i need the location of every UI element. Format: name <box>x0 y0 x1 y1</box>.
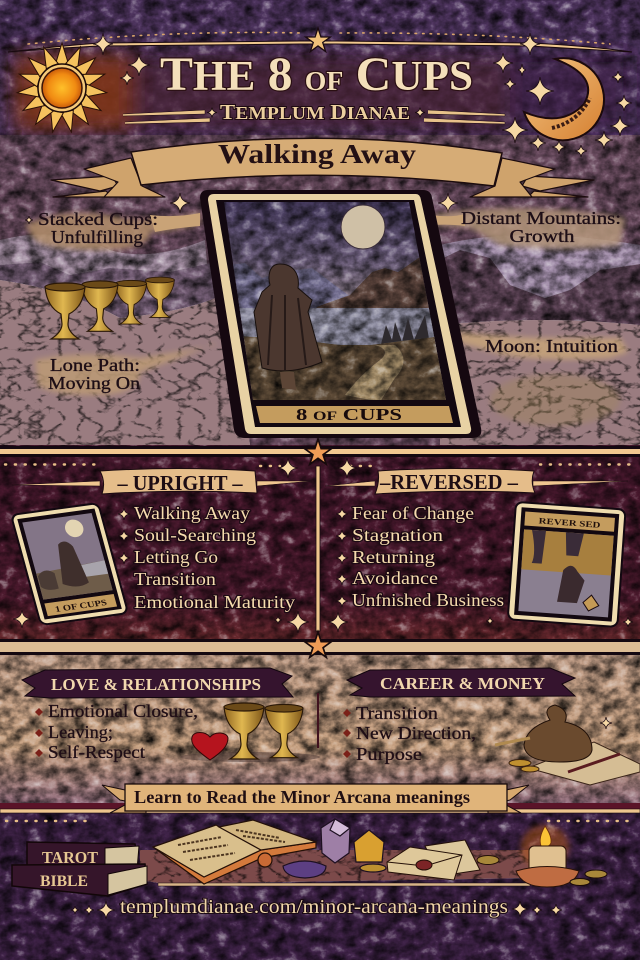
landscape sky left <box>0 234 210 310</box>
ribbon heading: career <box>347 668 575 697</box>
card cream frame <box>208 194 471 434</box>
small upright card <box>11 503 128 625</box>
lower star <box>305 632 331 657</box>
list: career: Purpose <box>356 744 422 764</box>
list: reversed meanings <box>336 503 504 610</box>
sparkle group upper <box>13 458 633 633</box>
background: header warm glow <box>15 55 630 130</box>
background: top mottled purple header <box>0 0 640 150</box>
card title strip <box>256 406 453 423</box>
label: Distant Mountains: Distant Mountains: <box>461 208 621 228</box>
subtitle rules <box>123 110 505 124</box>
list: reversed meanings: Returning <box>352 547 435 567</box>
sparkles around url <box>71 901 562 919</box>
books: Tarot and Bible: BIBLE <box>40 873 88 890</box>
divider band top <box>0 439 640 464</box>
centre thin divider <box>317 693 319 748</box>
card black border <box>200 190 481 438</box>
label: Distant Mountains <box>432 208 625 248</box>
subtitle: Templum Dianae: TEMPLUM DIANAE <box>220 100 410 124</box>
card inner border <box>216 200 461 427</box>
panel: upright reversed maroon section <box>0 445 640 650</box>
card left mountains <box>233 263 348 320</box>
icon: crescent moon <box>524 58 604 140</box>
label: Stacked Cups: Unfulfilling <box>51 227 143 247</box>
crystals <box>283 819 386 878</box>
background: landscape section <box>0 135 640 450</box>
illustration: two cups and heart <box>180 703 320 762</box>
panel: bottom dark section <box>0 808 640 960</box>
label: Moon Intuition: Moon: Intuition <box>485 336 618 356</box>
card caption: 8 OF CUPS <box>296 405 402 424</box>
panel: love and career parchment <box>0 655 640 808</box>
footer url: templumdianae.com/minor-arcana-meanings <box>120 896 508 918</box>
header top rule <box>8 28 632 55</box>
list: love <box>35 701 198 762</box>
banner: learn to read <box>102 784 529 813</box>
illustration: four golden cups <box>45 277 174 339</box>
label: Lone Path: Moving On <box>48 373 140 393</box>
main tarot card <box>200 190 481 438</box>
ribbon heading: love <box>22 668 293 698</box>
dotted ornaments bottom <box>6 820 636 822</box>
list: reversed meanings: Fear of Change <box>352 503 474 523</box>
list: upright meanings: Transition <box>134 569 216 589</box>
banner: learn to read: Learn to Read the Minor Arcana meanings <box>134 787 470 807</box>
small reversed card: REVER SED <box>538 515 601 530</box>
dotted ornaments <box>5 464 636 466</box>
list: reversed meanings: Unfnished Business <box>352 590 504 610</box>
banner tails <box>51 158 594 197</box>
list: reversed meanings: Stagnation <box>352 525 443 545</box>
panel heading: upright: – UPRIGHT – <box>117 471 243 495</box>
illustration: coin bag and scroll <box>495 705 640 785</box>
list: upright meanings: Emotional Maturity <box>134 592 295 612</box>
list: love: Leaving; <box>48 722 113 742</box>
list: upright meanings: Walking Away <box>134 503 250 523</box>
ribbon heading: career: CAREER & MONEY <box>380 674 545 693</box>
small reversed card <box>508 502 626 627</box>
banner heading: Walking Away <box>218 139 417 169</box>
banner body <box>131 138 502 186</box>
panel heading: reversed <box>325 468 628 494</box>
card figure <box>254 264 322 390</box>
card path <box>345 345 404 402</box>
divider band lower <box>0 639 640 655</box>
cobbles highlight right <box>490 374 620 426</box>
books: Tarot and Bible <box>12 842 147 896</box>
list: career: New Direction, <box>356 723 476 743</box>
envelope and letters <box>387 840 499 880</box>
ribbon heading: love: LOVE & RELATIONSHIPS <box>51 675 261 694</box>
list: career <box>343 703 476 764</box>
card right mountain <box>316 258 430 311</box>
sparkle beside card right <box>438 193 458 213</box>
brick ledge <box>140 850 530 884</box>
small upright card: 1 OF CUPS <box>54 597 108 614</box>
panel heading: upright <box>12 468 312 495</box>
books: Tarot and Bible: TAROT <box>42 848 99 867</box>
list: upright meanings <box>118 503 295 612</box>
mountains right <box>435 250 640 340</box>
banner: Walking Away <box>51 138 594 197</box>
label: Stacked Cups <box>25 209 200 250</box>
list: love: Emotional Closure, <box>48 701 198 721</box>
list: upright meanings: Letting Go <box>134 547 218 567</box>
centre vertical divider <box>316 466 320 631</box>
panel heading: reversed: –REVERSED – <box>379 470 518 494</box>
label: Moon Intuition <box>457 332 628 359</box>
label: Lone Path <box>35 343 215 395</box>
header sparkle stars <box>120 53 632 157</box>
card trees <box>381 315 429 344</box>
icon: sun <box>17 43 107 133</box>
candle in dish <box>516 825 607 887</box>
list: upright meanings: Soul-Searching <box>134 525 256 545</box>
open book <box>153 820 316 884</box>
card lake <box>240 308 437 350</box>
card ground <box>244 336 446 400</box>
sparkle beside card left <box>170 193 190 213</box>
card scene <box>220 200 450 405</box>
distant hills left <box>0 262 220 330</box>
label: Lone Path: Lone Path: <box>50 355 140 375</box>
list: reversed meanings: Avoidance <box>352 568 438 588</box>
list: career: Transition <box>356 703 438 723</box>
label: Distant Mountains: Growth <box>510 226 574 246</box>
label: Stacked Cups: Stacked Cups: <box>38 209 158 229</box>
card moon <box>341 205 385 249</box>
rule behind learn banner <box>0 803 640 813</box>
ledge rule <box>158 883 530 886</box>
rocky ground <box>0 280 640 445</box>
title: THE 8 OF CUPS <box>160 48 473 101</box>
section sparkle <box>600 717 612 729</box>
list: love: Self-Respect <box>48 742 145 762</box>
landscape sky right <box>440 235 640 310</box>
